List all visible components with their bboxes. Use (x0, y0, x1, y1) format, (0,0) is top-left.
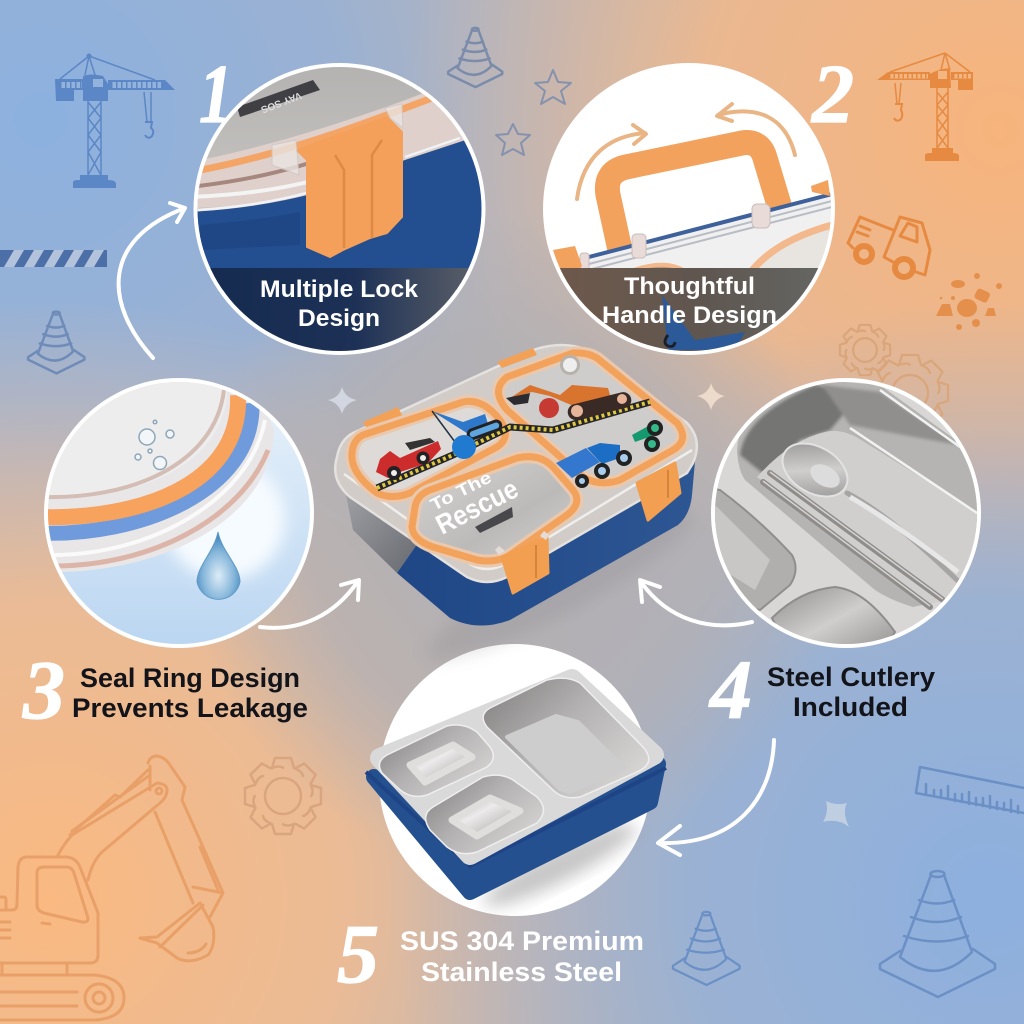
caption: multiple lock design: Multiple Lock (260, 276, 419, 303)
icon: water drop (197, 532, 240, 599)
number 4: 4 (708, 644, 752, 737)
icon: pebbles (936, 273, 1002, 330)
icon: top cone (448, 28, 502, 87)
spoon (782, 442, 960, 583)
icon: sparkles (328, 383, 849, 827)
label tag: VAY SOS (259, 89, 303, 115)
label 4: steel cutlery: Steel Cutlery (767, 662, 935, 692)
arrow: circle 4 to lunch box (640, 580, 752, 625)
compartment left (352, 401, 505, 496)
box side blue (397, 450, 696, 626)
upper compartment (737, 380, 990, 607)
to the rescue lettering: To The (427, 468, 495, 515)
icon: orange gear small (838, 323, 892, 377)
icon: orange toy truck (848, 217, 930, 277)
blue body (198, 140, 482, 290)
caption band (560, 268, 818, 351)
right latch (637, 463, 680, 520)
caption: thoughtful handle design (602, 273, 777, 329)
blue base (374, 764, 658, 892)
box side steel (345, 490, 420, 573)
arrow: circle 3 to circle 1 (119, 203, 185, 358)
label 3: seal ring design: Seal Ring Design (80, 663, 300, 693)
top latches (363, 348, 537, 429)
caption: thoughtful handle design: Thoughtful (624, 273, 755, 300)
panel: circle 1 multiple lock (190, 60, 490, 363)
arrow: label 4 to steel tray (658, 740, 774, 855)
number 1: 1 (199, 48, 233, 141)
icon: lower cone (673, 912, 740, 985)
panel: circle 5 stainless tray (366, 644, 666, 918)
label 3: seal ring design: Prevents Leakage (72, 693, 308, 723)
lid rim (198, 94, 464, 208)
blue crane vehicle (432, 411, 504, 459)
road (377, 402, 650, 488)
caption: multiple lock design (260, 276, 419, 332)
caption band (210, 268, 469, 351)
seal corners (584, 262, 692, 351)
lid (335, 345, 697, 582)
panel: circle 2 handle design (540, 63, 840, 363)
icon: left cone (28, 312, 84, 373)
compartment large (483, 678, 649, 798)
front latch (495, 531, 549, 593)
icon: outline stars (496, 70, 571, 155)
caption: multiple lock design: Design (298, 305, 380, 332)
icon: orange tower crane (877, 53, 973, 161)
compartment bottom (412, 457, 577, 561)
hinge clips (580, 204, 770, 271)
lower left compartment (715, 488, 796, 611)
lid rim (585, 194, 832, 258)
compartment right (498, 353, 683, 483)
icon: orange gear large (869, 352, 951, 434)
label 4: steel cutlery (767, 662, 935, 722)
label 5: sus 304 steel (400, 926, 644, 987)
green truck (632, 420, 663, 452)
number 3: 3 (22, 644, 65, 737)
number 2: 2 (810, 48, 854, 141)
to the rescue lettering: Rescue (431, 474, 523, 541)
label 5: sus 304 steel: Stainless Steel (421, 957, 622, 987)
caption: thoughtful handle design: Handle Design (602, 302, 777, 329)
steel top plate (380, 679, 654, 855)
panel: circle 4 steel cutlery (711, 378, 981, 648)
arrows on handle (577, 104, 795, 199)
label 3: seal ring design (72, 663, 308, 723)
hazard stripe (0, 250, 107, 267)
label tag (237, 80, 320, 117)
label 5: sus 304 steel: SUS 304 Premium (400, 926, 644, 956)
icon: bottom gear (242, 755, 324, 837)
compartment small top (379, 725, 493, 796)
water bubbles (135, 420, 174, 470)
shadow (414, 490, 706, 680)
icon: large cone (880, 871, 995, 997)
orange excavator (506, 385, 633, 422)
arrow: circle 3 to lunch box (260, 580, 359, 628)
latch (272, 104, 403, 257)
icon: excavator (0, 756, 223, 1020)
icon: blue tower crane (55, 54, 175, 188)
red truck (376, 438, 441, 480)
label 4: steel cutlery: Included (793, 692, 908, 722)
blue dump truck (556, 443, 632, 488)
number 5: 5 (337, 908, 379, 1001)
steam valve (560, 355, 580, 375)
bottom compartment (770, 586, 896, 644)
icon: ruler (916, 767, 1024, 813)
chopsticks (763, 473, 943, 607)
panel: circle 3 seal ring (40, 370, 320, 655)
handle (607, 143, 780, 250)
compartment small bottom (426, 775, 544, 854)
lunch box hero (335, 345, 706, 680)
